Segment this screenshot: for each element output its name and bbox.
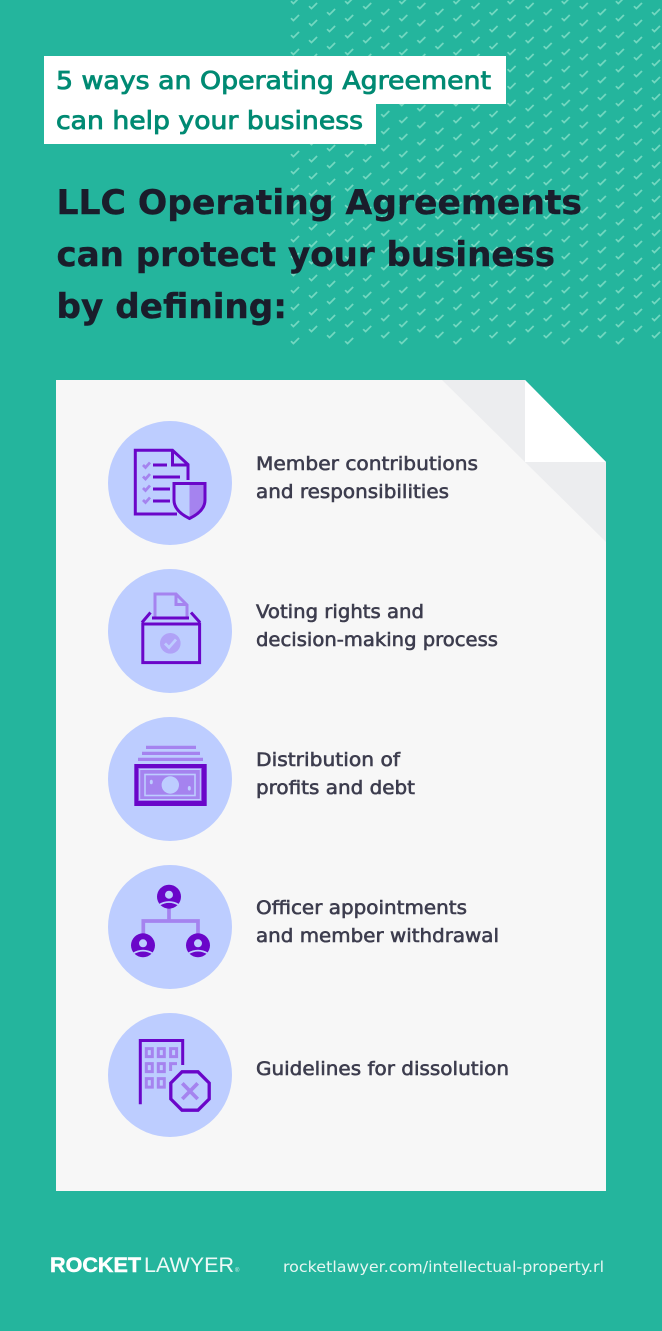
title: by defining: [56, 287, 287, 327]
text: Guidelines for dissolution [256, 1058, 509, 1080]
icon: org chart [108, 865, 232, 989]
item: member contributions [108, 421, 478, 545]
icon: stack of cash [108, 717, 232, 841]
logo: Rocket Lawyer: LAWYER [144, 1254, 234, 1277]
logo: Rocket Lawyer [50, 1254, 240, 1277]
text: Voting rights and [256, 601, 424, 623]
text: Officer appointments [256, 897, 467, 919]
item: officer appointments [108, 865, 499, 989]
title [56, 183, 582, 327]
subtitle label [44, 56, 506, 144]
text: decision-making process [256, 629, 498, 651]
subtitle label: can help your business [56, 106, 363, 135]
title: can protect your business [56, 235, 555, 275]
subtitle label: 5 ways an Operating Agreement [56, 66, 491, 95]
text [256, 897, 499, 947]
text: Distribution of [256, 749, 401, 771]
check mark pattern [286, 0, 662, 346]
text: and responsibilities [256, 481, 449, 503]
text [256, 601, 498, 651]
text: profits and debt [256, 777, 415, 799]
item: voting rights [108, 569, 498, 693]
text [256, 453, 478, 503]
icon: ballot box [108, 569, 232, 693]
icon: building with stop sign [108, 1013, 232, 1137]
logo: Rocket Lawyer: ® [235, 1267, 240, 1274]
logo: Rocket Lawyer: ROCKET [50, 1254, 141, 1277]
footer url: rocketlawyer.com/intellectual-property.rl [283, 1258, 604, 1276]
text [256, 749, 415, 799]
panel: document sheet [56, 380, 606, 1191]
text: Member contributions [256, 453, 478, 475]
text: and member withdrawal [256, 925, 499, 947]
item: distribution of profits [108, 717, 415, 841]
item: dissolution [108, 1013, 509, 1137]
icon: checklist with shield [108, 421, 232, 545]
title: LLC Operating Agreements [56, 183, 582, 223]
